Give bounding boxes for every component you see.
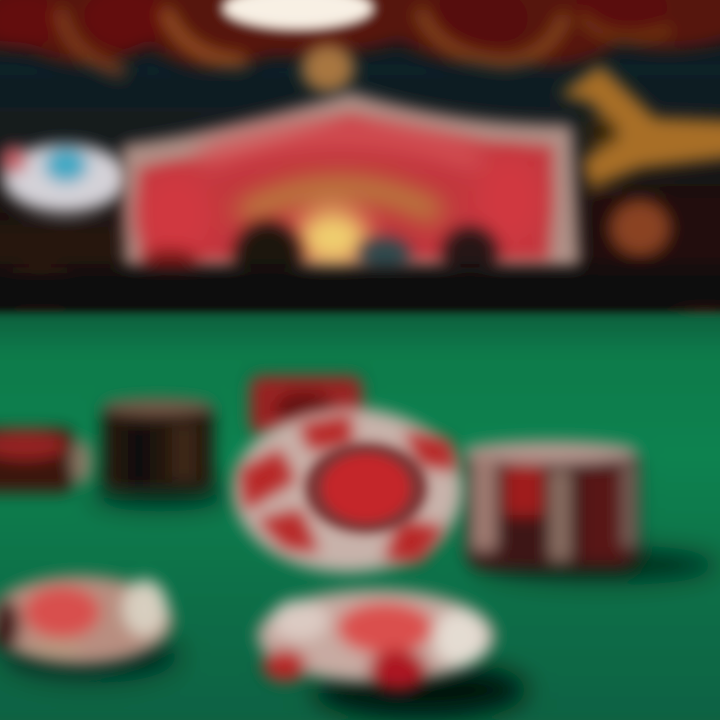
stage: white framed red arch [122, 92, 580, 294]
lamp glow above stage [302, 44, 354, 92]
poker chip: bottom left [0, 576, 172, 664]
main poker chip [234, 408, 462, 572]
ceiling: red and orange draped curtains [0, 0, 720, 72]
foreground: dark silhouette band [0, 268, 720, 312]
ceiling light [222, 0, 374, 30]
chip shadows [2, 483, 718, 718]
background: dark casino hall [0, 0, 720, 320]
left side: white and blue sign [0, 144, 127, 303]
chip stack: right [462, 441, 640, 570]
chip stack: behind main chip [250, 376, 362, 434]
chip stack: far left [0, 428, 92, 493]
table: green felt [0, 314, 720, 720]
right side: golden structure [560, 65, 720, 314]
poker chip: bottom centre [258, 590, 494, 690]
chip stack: dark left [102, 398, 214, 492]
